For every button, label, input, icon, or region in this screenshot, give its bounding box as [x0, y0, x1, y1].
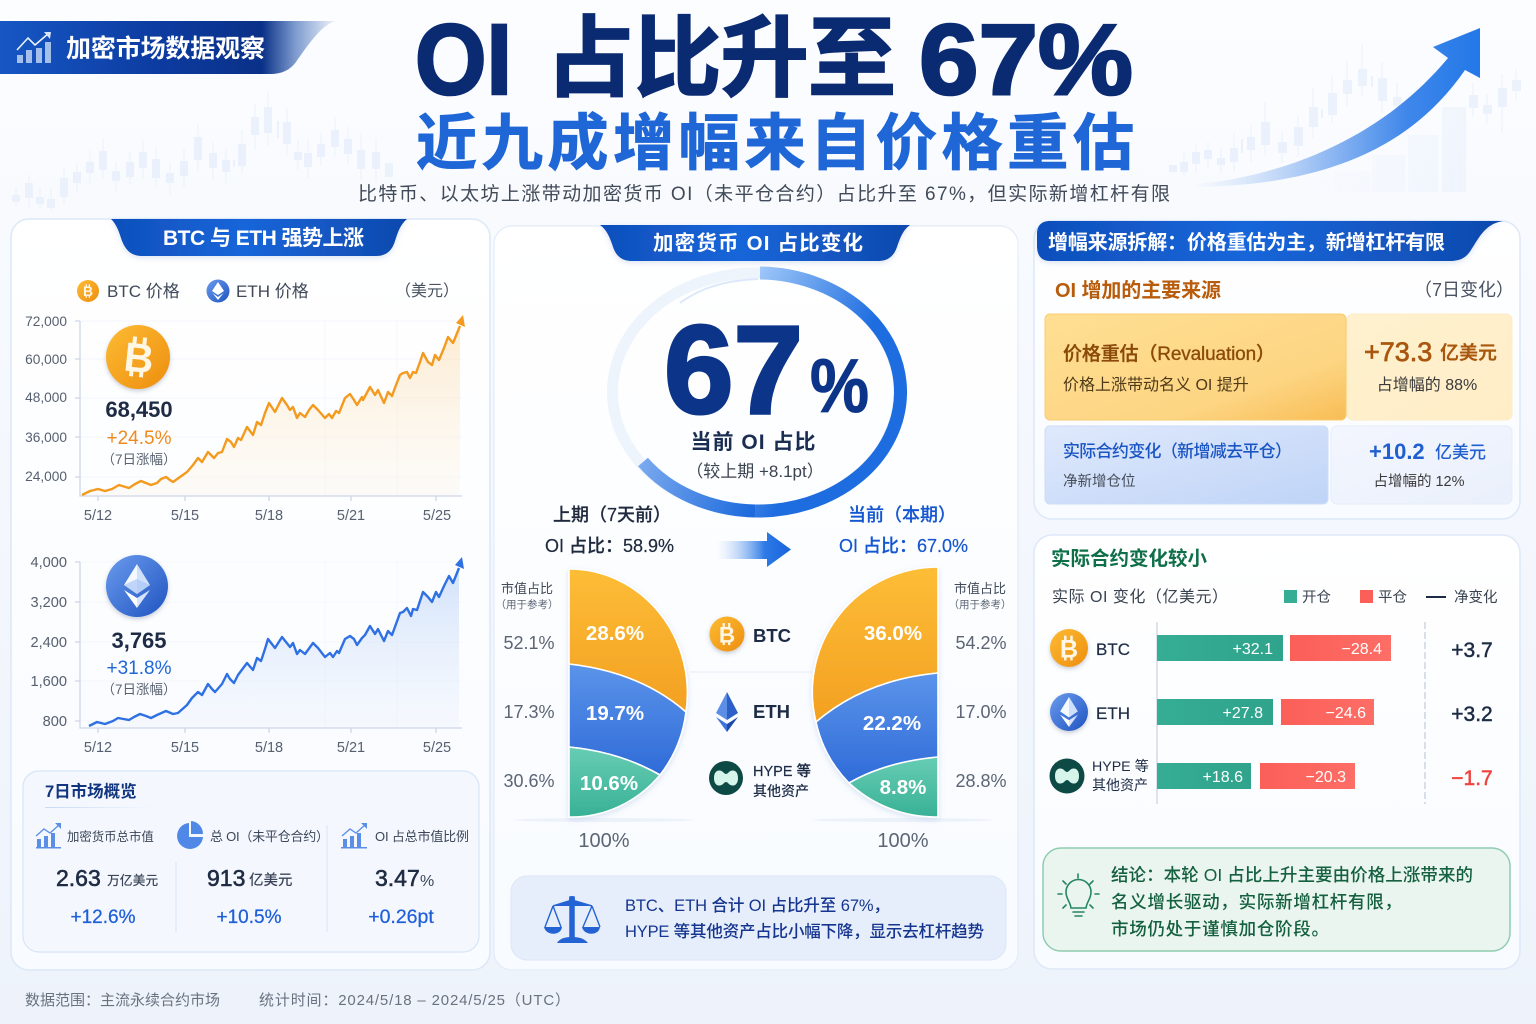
- title line 1: 67%: [919, 4, 1133, 116]
- ETH y axis labels: 1,600: [30, 674, 67, 690]
- callout text: BTC、ETH 合计 OI 占比升至 67%，: [625, 896, 890, 915]
- previous pie labels: 28.6%: [586, 622, 644, 645]
- right market cap share column: 市值占比: [954, 581, 1006, 596]
- previous pie labels: [580, 622, 644, 795]
- row: revaluation label: [1045, 314, 1346, 420]
- badge text: 加密市场数据观察: [66, 34, 265, 63]
- row: actual contract label: 实际合约变化（新增减去平仓）: [1063, 441, 1292, 461]
- row: HYPE: −1.7: [1451, 767, 1493, 790]
- metric: OI ratio: 3.47: [375, 865, 420, 891]
- chart subtitle: 实际 OI 变化（亿美元）: [1052, 588, 1228, 606]
- totals: [578, 830, 929, 852]
- gauge caption: （较上期 +8.1pt）: [686, 462, 824, 481]
- metric: market cap: 加密货币总市值: [67, 829, 154, 844]
- BTC stat: [101, 397, 177, 467]
- left market cap share column: 52.1%: [503, 633, 555, 653]
- chart: previous period half pie: [569, 569, 687, 817]
- left market cap share column: [496, 581, 558, 791]
- metric: market cap: 万亿美元: [107, 873, 158, 888]
- panel header ribbon: [111, 219, 407, 256]
- gauge value: %: [810, 344, 869, 429]
- chart legend: 开仓: [1302, 589, 1331, 606]
- icon: bitcoin coin: B: [122, 334, 156, 382]
- legend: HYPE: [709, 761, 811, 799]
- title line 2: 近九成增幅来自价格重估: [416, 109, 1134, 177]
- legend: BTC price: B: [83, 283, 93, 299]
- callout text: HYPE 等其他资产占比小幅下降，显示去杠杆趋势: [625, 922, 984, 941]
- metric: market cap: 2.63: [56, 865, 101, 891]
- metric: OI ratio: +0.26pt: [368, 906, 434, 928]
- right market cap share column: 28.8%: [955, 771, 1007, 791]
- panel: 加密货币 OI 占比变化: [494, 225, 1018, 970]
- row: HYPE: HYPE 等: [1092, 758, 1149, 775]
- current pie labels: 22.2%: [863, 712, 921, 735]
- footer: data scope and period: 数据范围：主流永续合约市场: [25, 992, 220, 1009]
- ETH x axis labels: 5/12: [84, 740, 112, 756]
- legend: BTC: BTC: [753, 625, 791, 646]
- ETH x axis labels: 5/15: [171, 740, 199, 756]
- callout text: [625, 896, 984, 941]
- BTC stat: 68,450: [105, 397, 173, 422]
- metric: market cap: [36, 823, 158, 928]
- ETH stat: （7日涨幅）: [101, 682, 177, 697]
- BTC stat: +24.5%: [107, 428, 172, 449]
- row: HYPE: 其他资产: [1092, 777, 1148, 793]
- overview heading: 7日市场概览: [45, 781, 137, 801]
- ETH y axis labels: [30, 555, 67, 730]
- BTC x axis labels: 5/21: [337, 508, 365, 524]
- row: HYPE: [1050, 758, 1493, 794]
- row: revaluation value: 亿美元: [1440, 342, 1497, 364]
- gauge ring 67%: [612, 273, 901, 511]
- chart legend: 净变化: [1454, 589, 1498, 606]
- row: revaluation value: +73.3: [1364, 337, 1432, 367]
- right market cap share column: 54.2%: [955, 633, 1007, 653]
- row: actual contract value: 占增幅的 12%: [1373, 473, 1465, 490]
- chart legend: [1284, 589, 1498, 606]
- panel header ribbon: [1037, 221, 1503, 261]
- icon: bitcoin coin: [106, 325, 170, 389]
- previous pie labels: 19.7%: [586, 702, 644, 725]
- legend: HYPE: 其他资产: [753, 783, 809, 799]
- gauge caption: [686, 431, 824, 481]
- section heading: OI 增加的主要来源: [1055, 279, 1221, 302]
- BTC y axis labels: 24,000: [25, 469, 67, 484]
- row: revaluation label: 价格上涨带动名义 OI 提升: [1063, 376, 1249, 394]
- previous period heading: [545, 505, 674, 556]
- panel header ribbon: BTC 与 ETH 强势上涨: [163, 227, 364, 250]
- BTC y axis labels: 60,000: [25, 352, 67, 367]
- title line 1: 占比升至: [546, 9, 896, 108]
- previous pie labels: 10.6%: [580, 772, 638, 795]
- ETH stat: [101, 628, 177, 697]
- BTC y axis labels: 72,000: [25, 314, 67, 329]
- ETH x axis labels: 5/25: [423, 740, 451, 756]
- row: ETH: +27.8: [1223, 705, 1263, 722]
- legend: ETH: [716, 692, 790, 732]
- BTC stat: （7日涨幅）: [101, 452, 177, 467]
- conclusion text: 结论：本轮 OI 占比上升主要由价格上涨带来的: [1111, 865, 1473, 885]
- BTC x axis labels: [84, 508, 451, 524]
- right market cap share column: [948, 581, 1012, 791]
- left market cap share column: （用于参考）: [496, 598, 558, 611]
- BTC x axis labels: 5/15: [171, 508, 199, 524]
- panel: 实际合约变化较小: [1034, 535, 1520, 969]
- panel header ribbon: [600, 225, 910, 261]
- legend: BTC price: BTC 价格: [107, 282, 180, 301]
- ETH x axis labels: [84, 740, 451, 756]
- metric: market cap: +12.6%: [71, 907, 136, 928]
- gauge value: 67: [664, 301, 803, 440]
- legend: ETH: ETH: [753, 701, 790, 722]
- row: revaluation value: [1347, 314, 1512, 420]
- ETH y axis labels: 4,000: [30, 555, 67, 571]
- gauge caption: 当前 OI 占比: [690, 431, 816, 454]
- panel: 7日市场概览: [23, 771, 479, 952]
- row: actual contract value: [1331, 426, 1512, 504]
- callout: conclusion: [1043, 848, 1510, 951]
- metric: OI ratio: OI 占总市值比例: [375, 829, 469, 844]
- right market cap share column: 17.0%: [955, 702, 1007, 722]
- chart legend: 平仓: [1378, 589, 1407, 606]
- panel: 增幅来源拆解: [1034, 221, 1520, 519]
- row: ETH: ETH: [1096, 704, 1130, 723]
- current pie labels: [863, 622, 926, 799]
- current pie labels: 8.8%: [880, 776, 926, 799]
- current period heading: [839, 505, 968, 556]
- previous period heading: OI 占比：58.9%: [545, 536, 674, 556]
- panel heading: 实际合约变化较小: [1051, 547, 1208, 570]
- ETH y axis labels: 3,200: [30, 595, 67, 611]
- left market cap share column: 17.3%: [503, 702, 555, 722]
- background candlesticks left: [12, 91, 393, 210]
- footer: data scope and period: [25, 992, 570, 1009]
- BTC y axis labels: 36,000: [25, 430, 67, 445]
- metric: total OI: +10.5%: [217, 907, 282, 928]
- row: actual contract label: 净新增仓位: [1063, 473, 1136, 490]
- icon: ethereum coin: [106, 555, 168, 617]
- legend: ETH price: ETH 价格: [236, 282, 309, 301]
- row: ETH: −24.6: [1326, 705, 1366, 722]
- period note: （7日变化）: [1414, 280, 1514, 300]
- row: ETH: +3.2: [1451, 703, 1493, 726]
- row: BTC: +3.7: [1451, 639, 1493, 662]
- conclusion text: 市场仍处于谨慎加仓阶段。: [1111, 919, 1329, 939]
- conclusion text: 名义增长驱动，实际新增杠杆有限，: [1111, 892, 1402, 912]
- ETH x axis labels: 5/21: [337, 740, 365, 756]
- row: BTC: B: [1060, 635, 1078, 663]
- BTC y axis labels: 48,000: [25, 390, 67, 405]
- BTC y axis labels: [25, 314, 67, 484]
- row: BTC: −28.4: [1342, 641, 1382, 658]
- chart: ETH price line: [75, 557, 464, 733]
- current pie labels: 36.0%: [864, 622, 922, 645]
- panel: BTC 与 ETH 强势上涨: [11, 219, 490, 970]
- row: actual contract label: [1045, 426, 1328, 504]
- badge: 加密市场数据观察: [0, 21, 336, 74]
- BTC x axis labels: 5/18: [255, 508, 283, 524]
- legend: HYPE: HYPE 等: [753, 762, 811, 780]
- BTC x axis labels: 5/12: [84, 508, 112, 524]
- row: BTC: +32.1: [1233, 641, 1273, 658]
- metric: total OI: 亿美元: [249, 871, 292, 889]
- left market cap share column: 市值占比: [501, 581, 553, 596]
- legend: BTC price: [77, 280, 180, 302]
- current period heading: OI 占比：67.0%: [839, 536, 968, 556]
- row: HYPE: +18.6: [1203, 769, 1243, 786]
- row: HYPE: −20.3: [1306, 769, 1346, 786]
- title line 1: OI: [415, 4, 512, 116]
- conclusion text: [1111, 865, 1473, 939]
- footer: data scope and period: 统计时间：2024/5/18 – 2024/5/25（UTC）: [259, 992, 570, 1009]
- metric: total OI: 913: [207, 865, 245, 891]
- row: actual contract value: +10.2: [1369, 439, 1425, 464]
- panel header ribbon: 增幅来源拆解：价格重估为主，新增杠杆有限: [1048, 231, 1445, 254]
- left market cap share column: 30.6%: [503, 771, 555, 791]
- row: revaluation label: 价格重估（Revaluation）: [1063, 343, 1275, 365]
- metric: OI ratio: [341, 823, 469, 928]
- title line 1: [415, 4, 1133, 116]
- metric: total OI: [177, 821, 329, 928]
- panel header ribbon: 加密货币 OI 占比变化: [653, 231, 863, 255]
- background candlesticks and bars right: [1169, 44, 1521, 192]
- row: BTC: BTC: [1096, 640, 1130, 659]
- legend: BTC: [710, 616, 791, 652]
- metric: OI ratio: %: [420, 873, 434, 890]
- previous period heading: 上期（7天前）: [553, 505, 671, 525]
- row: actual contract value: 亿美元: [1435, 443, 1486, 462]
- legend: ETH price: [206, 280, 309, 302]
- chart: BTC price line: [75, 315, 465, 501]
- legend: BTC: B: [719, 622, 735, 647]
- current period heading: 当前（本期）: [848, 505, 956, 525]
- ETH y axis labels: 2,400: [30, 635, 67, 651]
- row: ETH: [1050, 693, 1493, 731]
- icon: rising bar chart: [17, 32, 51, 63]
- chart: current period half pie: [812, 567, 938, 817]
- upward arrow: [1187, 28, 1480, 187]
- ETH stat: +31.8%: [107, 658, 172, 679]
- BTC x axis labels: 5/25: [423, 508, 451, 524]
- callout: trend note: [511, 876, 1006, 960]
- ETH stat: 3,765: [111, 628, 167, 653]
- icon: balance scale: [544, 896, 600, 943]
- subtitle: 比特币、以太坊上涨带动加密货币 OI（未平仓合约）占比升至 67%，但实际新增杠杆有限: [358, 183, 1170, 205]
- totals: 100%: [877, 830, 929, 852]
- ETH y axis labels: 800: [43, 714, 67, 730]
- row: revaluation value: 占增幅的 88%: [1377, 376, 1477, 394]
- metric: total OI: 总 OI（未平仓合约）: [210, 829, 329, 844]
- gauge value: [664, 301, 869, 440]
- row: BTC: [1050, 629, 1493, 667]
- arrow between periods: [716, 532, 791, 567]
- totals: 100%: [578, 830, 630, 852]
- unit label: （美元）: [395, 282, 459, 300]
- right market cap share column: （用于参考）: [948, 598, 1012, 611]
- ETH x axis labels: 5/18: [255, 740, 283, 756]
- icon: lightbulb: [1058, 874, 1099, 916]
